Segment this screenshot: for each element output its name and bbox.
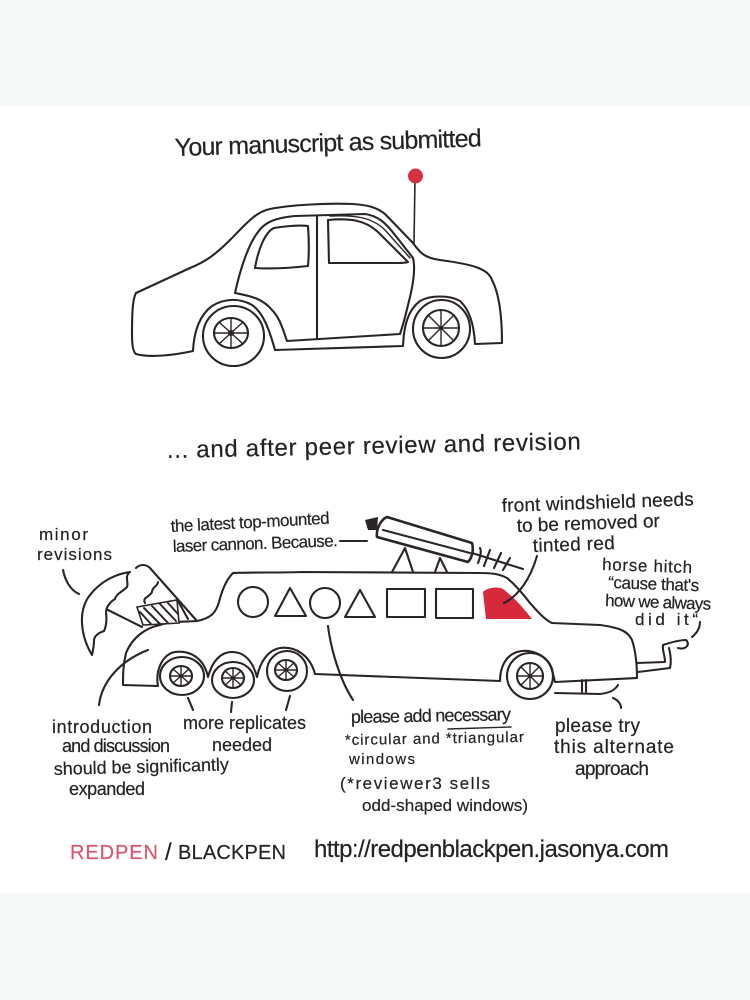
footer: url: http://redpenblackpen.jasonya.com bbox=[314, 836, 669, 863]
trunk with umbrella flap bbox=[82, 565, 197, 655]
rear wheel bbox=[203, 306, 264, 366]
label: please add necessary windows: please add necessary bbox=[351, 704, 511, 727]
front side window bbox=[328, 219, 408, 263]
label: horse hitch: horse hitch bbox=[602, 555, 692, 577]
label: introduction and discussion bbox=[52, 717, 229, 799]
footer: brand bbox=[70, 839, 286, 866]
limousine body outline bbox=[123, 572, 637, 686]
callout lines bbox=[63, 541, 700, 712]
label: please add necessary windows: odd-shaped windows) bbox=[362, 796, 528, 815]
label: horse hitch bbox=[602, 555, 711, 629]
label: please try this alternate approach: this alternate bbox=[554, 737, 674, 758]
label: please add necessary windows: (*reviewer3 sells bbox=[340, 774, 490, 793]
small car illustration bbox=[132, 168, 502, 366]
label: please try this alternate approach: please try bbox=[555, 716, 640, 737]
label: introduction and discussion: introduction bbox=[52, 717, 152, 737]
front wheel bbox=[507, 653, 553, 699]
label: front windshield: tinted red bbox=[532, 533, 615, 557]
red windshield bbox=[483, 588, 532, 619]
reviewed limousine illustration bbox=[82, 517, 688, 699]
windows: circles and triangles bbox=[238, 587, 473, 618]
label: front windshield: to be removed or bbox=[516, 511, 661, 537]
title: manuscript as submitted: Your manuscript as submitted bbox=[174, 124, 482, 162]
label: please add necessary windows bbox=[340, 704, 528, 815]
alternate approach ski bbox=[555, 680, 618, 694]
label: please try this alternate approach bbox=[554, 716, 674, 780]
label: please add necessary windows: windows bbox=[348, 751, 415, 768]
label: front windshield: front windshield needs bbox=[501, 489, 694, 517]
footer: brand: REDPEN bbox=[70, 842, 158, 864]
label: front windshield bbox=[501, 489, 694, 557]
rear wheels bbox=[160, 651, 307, 698]
front wheel bbox=[413, 300, 470, 358]
label: laser cannon: laser cannon. Because. bbox=[172, 531, 338, 556]
label: more replicates bbox=[183, 713, 306, 755]
background sheet bbox=[0, 106, 750, 893]
door split line bbox=[316, 216, 318, 338]
label: horse hitch: how we always bbox=[605, 591, 711, 614]
label: horse hitch: “cause that's bbox=[608, 573, 699, 595]
label: introduction and discussion: should be significantly bbox=[54, 754, 229, 779]
rear side window bbox=[255, 226, 309, 268]
label: please try this alternate approach: approach bbox=[575, 759, 649, 780]
horse hitch bbox=[637, 640, 688, 672]
label: horse hitch: did it“ bbox=[635, 610, 698, 629]
label: laser cannon: the latest top-mounted bbox=[170, 509, 330, 536]
label: introduction and discussion: and discussion bbox=[62, 736, 170, 756]
label: please add necessary windows: *circular and *triangular bbox=[345, 729, 524, 749]
front window double line bbox=[330, 216, 410, 258]
label: minor revisions: revisions bbox=[37, 545, 112, 564]
label: minor revisions bbox=[37, 525, 112, 564]
label: more replicates: more replicates bbox=[183, 713, 306, 733]
car body outline bbox=[132, 204, 502, 356]
label: more replicates: needed bbox=[212, 735, 272, 755]
footer: brand: BLACKPEN bbox=[178, 842, 286, 864]
label: laser cannon bbox=[170, 509, 338, 556]
label: minor revisions: minor bbox=[39, 525, 88, 544]
antenna with red ball bbox=[408, 168, 423, 243]
label: introduction and discussion: expanded bbox=[69, 779, 145, 799]
footer: brand: / bbox=[165, 839, 172, 866]
laser cannon bbox=[365, 517, 523, 572]
door outline bbox=[235, 214, 414, 341]
subtitle: after peer review and revision: ... and after peer review and revision bbox=[167, 428, 581, 464]
